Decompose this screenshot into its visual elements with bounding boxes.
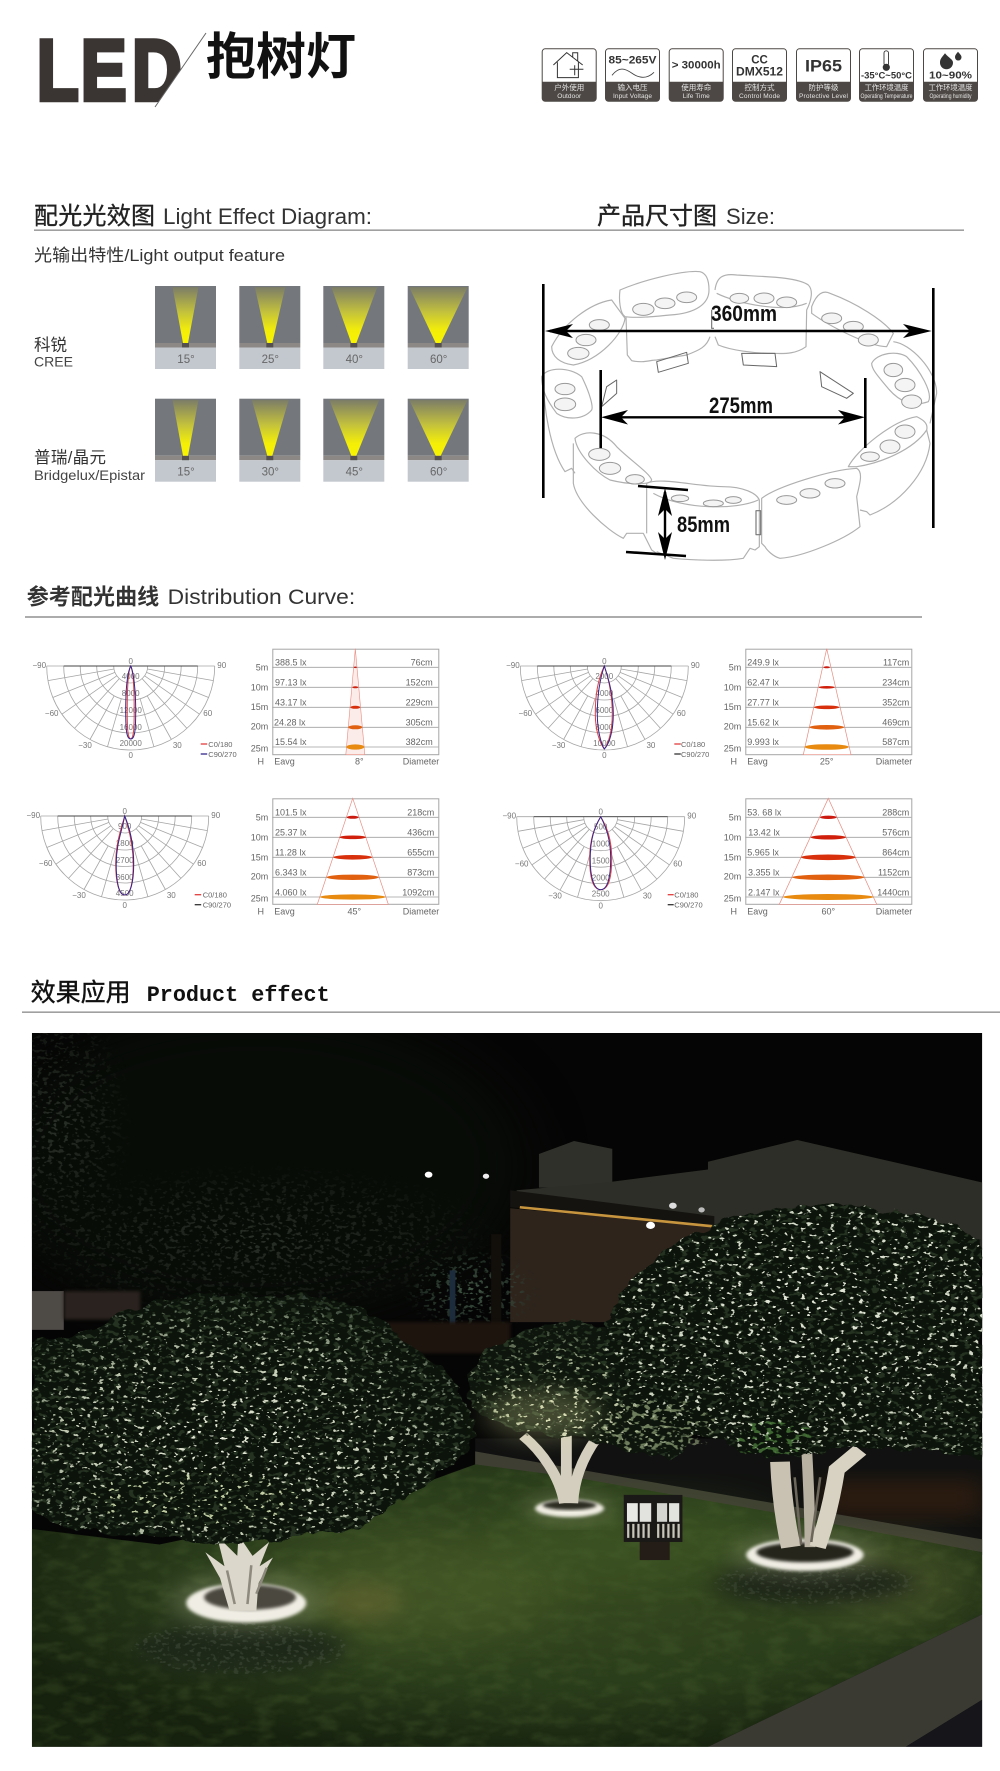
table 45 degrees: 15m: [251, 852, 268, 862]
polar chart 25 degrees: 10000: [593, 739, 616, 748]
label: CREE: [34, 336, 73, 370]
polar chart 25 degrees: 4000: [595, 689, 614, 698]
polar chart 45 degrees: 1800: [116, 839, 134, 848]
dimension: 275mm: [601, 370, 865, 448]
table 8 degrees: 15m: [251, 702, 268, 712]
table 60 degrees: 53. 68 lx: [747, 807, 782, 817]
table 60 degrees: 20m: [724, 871, 741, 881]
polar chart 60 degrees: 1500: [592, 857, 610, 866]
icon: operating temperature: 工作环境温度: [864, 82, 909, 92]
icon: outdoor: [542, 49, 596, 101]
heading: product effect: 效果应用: [31, 979, 131, 1007]
table 45 degrees: 4.060 lx: [275, 887, 307, 897]
polar chart 45 degrees: 2700: [116, 856, 134, 865]
product ring line drawing: [542, 271, 937, 560]
table 45 degrees: 10m: [251, 832, 268, 842]
table 25 degrees: 25°: [820, 757, 834, 767]
dimension: 360mm: [543, 284, 933, 528]
table 8 degrees: [251, 649, 439, 767]
table 60 degrees: 10m: [724, 832, 741, 842]
beam swatches row 2: [155, 399, 469, 482]
table 25 degrees: 9.993 lx: [747, 737, 779, 747]
table 60 degrees: 5m: [729, 812, 741, 822]
title: LED logo: LED: [37, 23, 182, 119]
polar chart 8 degrees: [33, 657, 237, 760]
table 25 degrees: 20m: [724, 722, 741, 732]
table 60 degrees: 1152cm: [878, 867, 909, 877]
table 8 degrees: 24.28 lx: [274, 718, 306, 728]
polar chart 45 degrees: 3600: [116, 873, 134, 882]
icon: input voltage: 输入电压: [618, 82, 648, 92]
polar chart 25 degrees: [506, 657, 709, 760]
table 60 degrees: 3.355 lx: [748, 867, 780, 877]
polar chart 25 degrees: C0/180: [681, 740, 705, 749]
table 25 degrees: 117cm: [883, 658, 909, 668]
dimension: 360mm: 360mm: [711, 301, 777, 326]
label: Bridgelux/Epistar: Bridgelux/Epistar: [34, 467, 145, 483]
heading: light effect diagram: [34, 203, 372, 230]
icon: life time: 使用寿命: [681, 82, 712, 92]
icon: protection level: 防护等级: [808, 82, 839, 92]
icon: input voltage: Input Voltage: [613, 93, 652, 100]
table 45 degrees: [251, 798, 439, 916]
icon: control mode: Control Mode: [739, 93, 780, 100]
table 25 degrees: 5m: [729, 663, 741, 673]
table 45 degrees: 873cm: [407, 867, 434, 877]
table 60 degrees: 5.965 lx: [747, 847, 779, 857]
icon: operating temperature: -35°C~50°C: [861, 70, 913, 80]
table 45 degrees: 5m: [256, 812, 268, 822]
table 60 degrees: 25m: [724, 893, 741, 903]
table 45 degrees: 20m: [251, 871, 268, 881]
dimension: 275mm: 275mm: [709, 393, 773, 418]
lawn: [32, 1464, 982, 1747]
tree left: [32, 1294, 688, 1544]
polar chart 25 degrees: 6000: [595, 706, 614, 715]
beam swatches row 1: [155, 286, 469, 369]
heading: product effect: [31, 979, 330, 1008]
swatch 60 degrees: 60°: [430, 354, 447, 366]
table 60 degrees: 2.147 lx: [748, 887, 780, 897]
swatch 30 degrees: [239, 399, 300, 482]
light ring left: [186, 1583, 306, 1623]
table 45 degrees: 25m: [251, 893, 268, 903]
swatch 45 degrees: 45°: [346, 467, 363, 479]
table 45 degrees: 11.28 lx: [275, 847, 306, 857]
icon: operating humidity: [924, 49, 978, 101]
polar chart 8 degrees: 20000: [120, 739, 142, 748]
light glows: [170, 1495, 878, 1630]
swatch 40 degrees: [323, 286, 384, 369]
icon: protection level: IP65: [805, 57, 842, 76]
polar chart 60 degrees: 500: [594, 823, 608, 832]
table 45 degrees: 436cm: [407, 827, 434, 837]
table 8 degrees: 8°: [355, 757, 364, 767]
swatch 40 degrees: 40°: [346, 354, 363, 366]
swatch 15 degrees: 15°: [177, 354, 195, 366]
polar chart 8 degrees: 8000: [122, 689, 140, 698]
table 60 degrees: [724, 798, 912, 916]
icon: operating humidity: 10~90%: [929, 69, 973, 81]
sub heading: light output feature: 光输出特性/Light output feature: [34, 246, 285, 265]
table 60 degrees: 864cm: [882, 847, 909, 857]
table 45 degrees: 45°: [347, 906, 361, 916]
polar chart 8 degrees: 12000: [120, 706, 142, 715]
heading: light effect diagram: Light Effect Diagram:: [163, 204, 372, 229]
table 25 degrees: Eavg: [747, 757, 768, 767]
swatch 15 degrees: [155, 399, 216, 482]
table 8 degrees: 10m: [251, 683, 268, 693]
table 25 degrees: 15.62 lx: [747, 718, 779, 728]
heading: size: Size:: [726, 204, 775, 229]
icon: life time: [669, 49, 723, 101]
icon: operating humidity: Operating humidity: [930, 93, 972, 100]
dimension: 85mm: [626, 486, 730, 560]
table 60 degrees: 1440cm: [877, 887, 909, 897]
table 8 degrees: 76cm: [411, 658, 433, 668]
table 45 degrees: H: [257, 906, 264, 916]
icon: life time: Life Time: [683, 93, 710, 100]
table 8 degrees: 229cm: [406, 698, 433, 708]
trunk left: [205, 1535, 273, 1611]
table 25 degrees: 469cm: [882, 718, 909, 728]
icon: input voltage: [606, 49, 660, 101]
table 60 degrees: 288cm: [882, 807, 909, 817]
polar chart 8 degrees: 4000: [122, 672, 140, 681]
table 45 degrees: 218cm: [407, 807, 434, 817]
trunk middle: [523, 1428, 596, 1503]
table 25 degrees: 234cm: [882, 678, 909, 688]
road and pavement: [475, 1439, 982, 1555]
table 8 degrees: 305cm: [406, 718, 433, 728]
swatch 25 degrees: [239, 286, 300, 369]
polar chart 60 degrees: [503, 808, 703, 911]
table 45 degrees: Eavg: [274, 906, 295, 916]
heading: distribution curve: Distribution Curve:: [168, 586, 355, 609]
icon: outdoor: 户外使用: [554, 82, 584, 92]
icon: control mode: DMX512: [736, 66, 783, 78]
icon: life time: > 30000h: [672, 59, 721, 71]
tree right: [600, 1206, 982, 1459]
icon: control mode: CC: [751, 54, 768, 66]
swatch 15 degrees: 15°: [177, 467, 195, 479]
polar chart 8 degrees: C0/180: [208, 740, 232, 749]
table 25 degrees: 249.9 lx: [747, 658, 779, 668]
heading: product effect: Product effect: [147, 983, 330, 1008]
table 8 degrees: Diameter: [403, 757, 439, 767]
title: LED logo: [40, 32, 206, 108]
heading: light effect diagram: 配光光效图: [34, 203, 155, 230]
polar chart 8 degrees: 16000: [120, 723, 142, 732]
table 45 degrees: 1092cm: [402, 887, 434, 897]
label: Bridgelux/Epistar: 普瑞/晶元: [34, 448, 106, 467]
heading: distribution curve: [27, 584, 355, 610]
polar chart 60 degrees: C90/270: [674, 901, 703, 910]
table 25 degrees: 62.47 lx: [747, 678, 779, 688]
icon: protection level: Protective Level: [799, 93, 849, 100]
tree middle: [466, 1321, 688, 1459]
table 8 degrees: 5m: [256, 663, 268, 673]
polar chart 8 degrees: C90/270: [208, 750, 237, 759]
icon: protection level: [796, 49, 850, 101]
title: product name: 抱树灯: [206, 29, 356, 85]
label: CREE: CREE: [34, 354, 73, 370]
table 60 degrees: Eavg: [747, 906, 768, 916]
swatch 45 degrees: [323, 399, 384, 482]
table 8 degrees: 388.5 lx: [275, 658, 307, 668]
background building: [425, 1140, 982, 1322]
table 8 degrees: 43.17 lx: [275, 698, 307, 708]
trunk right: [780, 1450, 860, 1547]
dimension: 85mm: 85mm: [677, 512, 730, 537]
swatch 60 degrees: 60°: [430, 467, 447, 479]
label: Bridgelux/Epistar: [34, 448, 145, 483]
table 25 degrees: 10m: [724, 683, 741, 693]
garden lantern: [624, 1495, 682, 1560]
background dark trees: [32, 1033, 480, 1303]
light ring right: [746, 1539, 864, 1571]
polar chart 45 degrees: [27, 807, 231, 910]
heading: size: [597, 203, 775, 230]
garden path: [708, 1614, 982, 1747]
polar chart 25 degrees: 8000: [595, 723, 614, 732]
polar chart 60 degrees: 1000: [592, 840, 610, 849]
label: CREE: 科锐: [34, 336, 67, 354]
icon: control mode: [732, 49, 786, 101]
polar chart 45 degrees: 900: [118, 822, 132, 831]
table 8 degrees: 382cm: [406, 737, 433, 747]
table 45 degrees: Diameter: [403, 906, 439, 916]
table 60 degrees: Diameter: [876, 906, 912, 916]
icon: operating temperature: [860, 49, 914, 101]
polar chart 25 degrees: C90/270: [681, 750, 709, 759]
table 45 degrees: 101.5 lx: [275, 807, 307, 817]
icon: outdoor: Outdoor: [557, 93, 582, 100]
polar chart 25 degrees: 2000: [595, 672, 614, 681]
table 8 degrees: H: [257, 757, 264, 767]
heading: size: 产品尺寸图: [597, 203, 717, 230]
polar chart 45 degrees: 4500: [116, 889, 134, 898]
table 45 degrees: 6.343 lx: [275, 867, 307, 877]
table 60 degrees: 13.42 lx: [748, 827, 780, 837]
table 8 degrees: 20m: [251, 722, 268, 732]
table 60 degrees: H: [730, 906, 737, 916]
table 25 degrees: Diameter: [876, 757, 912, 767]
table 8 degrees: Eavg: [274, 757, 295, 767]
table 60 degrees: 576cm: [882, 827, 909, 837]
icon: operating humidity: 工作环境温度: [928, 82, 973, 92]
plant beds: [131, 1563, 918, 1674]
table 8 degrees: 25m: [251, 744, 268, 754]
swatch 60 degrees: [408, 286, 469, 369]
swatch 30 degrees: 30°: [262, 467, 279, 479]
spec icons row: [542, 49, 978, 101]
table 25 degrees: 25m: [724, 744, 741, 754]
icon: input voltage: 85~265V: [608, 54, 657, 66]
icon: control mode: 控制方式: [744, 82, 775, 92]
midground foliage and poles: [32, 1234, 542, 1353]
table 8 degrees: 152cm: [406, 678, 433, 688]
polar chart 45 degrees: C90/270: [203, 901, 231, 910]
table 60 degrees: 60°: [821, 906, 835, 916]
table 25 degrees: 15m: [724, 702, 741, 712]
icon: operating temperature: Operating Temperature: [860, 93, 913, 100]
polar chart 60 degrees: 2000: [592, 874, 610, 883]
table 25 degrees: 352cm: [882, 698, 909, 708]
swatch 60 degrees: [408, 399, 469, 482]
heading: distribution curve: 参考配光曲线: [27, 584, 159, 610]
table 25 degrees: H: [730, 757, 737, 767]
table 45 degrees: 655cm: [407, 847, 434, 857]
polar chart 45 degrees: C0/180: [203, 891, 227, 900]
light ring middle: [535, 1500, 604, 1517]
swatch 25 degrees: 25°: [262, 354, 279, 366]
photo: night garden with lit trees: [0, 991, 982, 1747]
table 8 degrees: 97.13 lx: [275, 678, 307, 688]
polar chart 60 degrees: 2500: [592, 890, 610, 899]
polar chart 60 degrees: C0/180: [674, 891, 698, 900]
table 25 degrees: 27.77 lx: [747, 698, 779, 708]
table 60 degrees: 15m: [724, 852, 741, 862]
table 8 degrees: 15.54 lx: [275, 737, 307, 747]
swatch 15 degrees: [155, 286, 216, 369]
table 45 degrees: 25.37 lx: [275, 827, 307, 837]
table 25 degrees: [724, 649, 912, 767]
table 25 degrees: 587cm: [882, 737, 909, 747]
